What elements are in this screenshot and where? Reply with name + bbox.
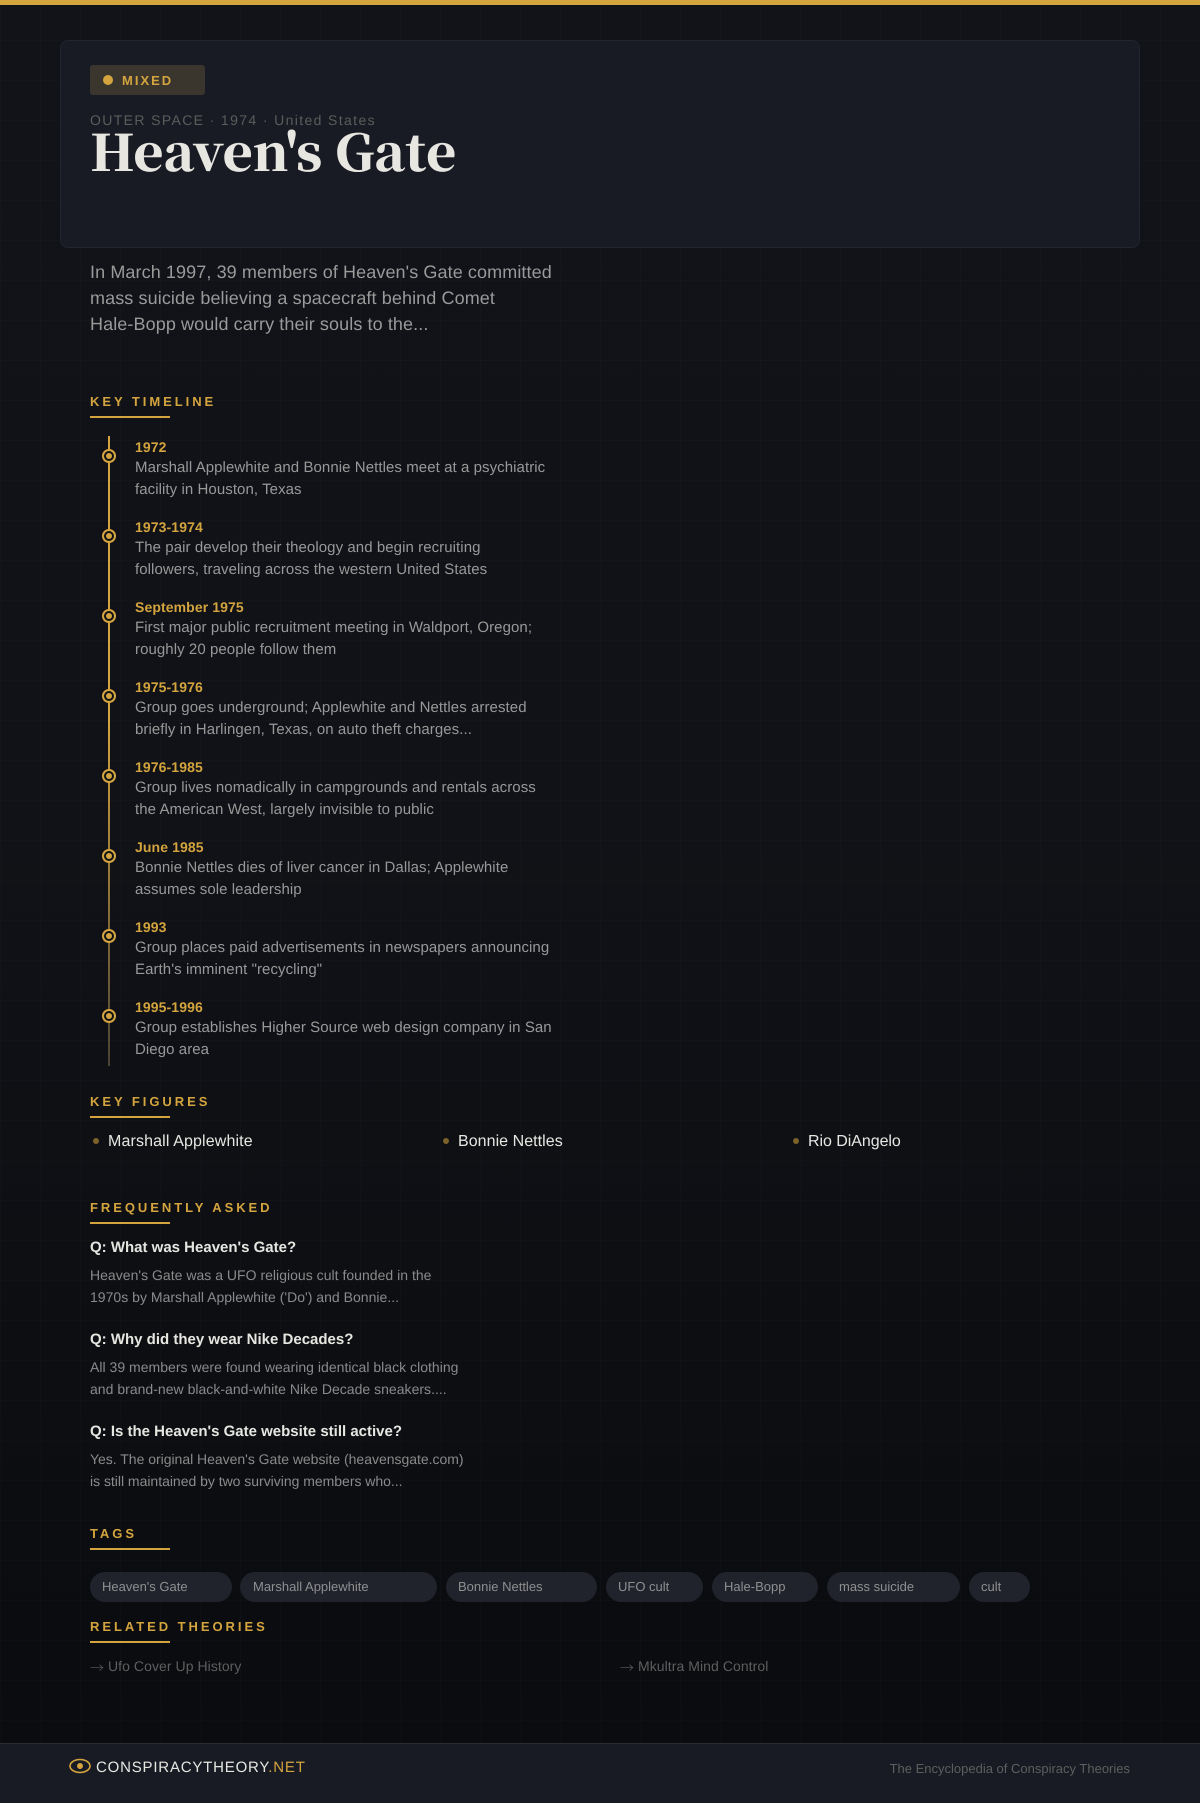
faq 1: Heaven's Gate was a UFO religious cult founded in the — [90, 1267, 431, 1283]
tag: cult: cult — [981, 1579, 1001, 1594]
event 1973-1974: 1973-1974 — [135, 519, 203, 535]
panel: header card — [60, 40, 1140, 248]
intro text — [90, 262, 552, 334]
event 1976-1985: the American West, largely invisible to public — [135, 801, 434, 818]
intro text: mass suicide believing a spacecraft behind Comet — [90, 288, 495, 308]
event June 1985: Bonnie Nettles dies of liver cancer in Dallas; Applewhite — [135, 859, 508, 876]
faq 1 — [90, 1239, 431, 1305]
tag: UFO cult — [606, 1572, 703, 1602]
event 1995-1996: 1995-1996 — [135, 999, 203, 1015]
timeline axis — [108, 436, 110, 1066]
event 1975-1976 — [102, 679, 527, 738]
event 1973-1974: The pair develop their theology and begin recruiting — [135, 539, 481, 556]
tag: UFO cult: UFO cult — [618, 1579, 669, 1594]
faq 3 — [90, 1423, 464, 1489]
event June 1985: assumes sole leadership — [135, 881, 302, 898]
top accent bar — [0, 0, 1200, 5]
event 1976-1985: 1976-1985 — [135, 759, 203, 775]
event 1993: 1993 — [135, 919, 167, 935]
footer — [0, 1743, 1200, 1803]
figure: Rio DiAngelo: Rio DiAngelo — [808, 1133, 901, 1150]
faq 3: Q: Is the Heaven's Gate website still active? — [90, 1423, 402, 1440]
event June 1985 — [102, 839, 508, 898]
faq 3: is still maintained by two surviving members who... — [90, 1473, 403, 1489]
heading: key figures: KEY FIGURES — [90, 1094, 210, 1109]
event 1995-1996: Diego area — [135, 1041, 209, 1058]
figure: Marshall Applewhite: Marshall Applewhite — [108, 1133, 253, 1150]
badge: mixed — [90, 65, 205, 95]
faq 1: 1970s by Marshall Applewhite ('Do') and Bonnie... — [90, 1289, 399, 1305]
event 1972: facility in Houston, Texas — [135, 481, 302, 498]
heading: key timeline: KEY TIMELINE — [90, 394, 216, 409]
meta line: OUTER SPACE · 1974 · United States — [90, 112, 376, 128]
tag: cult — [969, 1572, 1030, 1602]
title: Heaven's Gate — [90, 114, 456, 186]
related link: Ufo Cover Up History: → Ufo Cover Up History — [90, 1658, 241, 1678]
faq 2: All 39 members were found wearing identical black clothing — [90, 1359, 458, 1375]
event June 1985: June 1985 — [135, 839, 204, 855]
event 1993: Earth's imminent "recycling" — [135, 961, 322, 978]
tag: Marshall Applewhite: Marshall Applewhite — [253, 1579, 369, 1594]
tag: Bonnie Nettles: Bonnie Nettles — [458, 1579, 543, 1594]
tag: Hale-Bopp: Hale-Bopp — [724, 1579, 785, 1594]
icon: eye — [69, 1758, 91, 1774]
event 1975-1976: briefly in Harlingen, Texas, on auto theft charges... — [135, 721, 472, 738]
event September 1975 — [102, 599, 532, 658]
event 1972: 1972 — [135, 439, 167, 455]
event 1972 — [102, 439, 545, 498]
tag: Hale-Bopp — [712, 1572, 818, 1602]
event 1995-1996 — [102, 999, 552, 1058]
heading: related theories: RELATED THEORIES — [90, 1619, 268, 1634]
event 1976-1985 — [102, 759, 536, 818]
event 1995-1996: Group establishes Higher Source web design company in San — [135, 1019, 552, 1036]
heading: frequently asked: FREQUENTLY ASKED — [90, 1200, 273, 1215]
tagline: The Encyclopedia of Conspiracy Theories — [890, 1761, 1130, 1776]
badge: mixed: MIXED — [122, 73, 173, 88]
event 1975-1976: 1975-1976 — [135, 679, 203, 695]
tag: Bonnie Nettles — [446, 1572, 597, 1602]
tag: Marshall Applewhite — [240, 1572, 437, 1602]
heading: tags: TAGS — [90, 1526, 137, 1541]
event 1976-1985: Group lives nomadically in campgrounds and rentals across — [135, 779, 536, 796]
tag: Heaven's Gate — [90, 1572, 232, 1602]
tag: mass suicide: mass suicide — [839, 1579, 914, 1594]
faq 1: Q: What was Heaven's Gate? — [90, 1239, 296, 1256]
tag: Heaven's Gate: Heaven's Gate — [102, 1579, 188, 1594]
figure: Bonnie Nettles: Bonnie Nettles — [458, 1133, 563, 1150]
faq 3: Yes. The original Heaven's Gate website (heavensgate.com) — [90, 1451, 464, 1467]
event 1993: Group places paid advertisements in newspapers announcing — [135, 939, 549, 956]
faq 2: and brand-new black-and-white Nike Decade sneakers.... — [90, 1381, 447, 1397]
tag: mass suicide — [827, 1572, 960, 1602]
event 1972: Marshall Applewhite and Bonnie Nettles meet at a psychiatric — [135, 459, 545, 476]
event September 1975: roughly 20 people follow them — [135, 641, 336, 658]
related link: Mkultra Mind Control: → Mkultra Mind Control — [620, 1658, 768, 1678]
faq 2 — [90, 1331, 458, 1397]
event September 1975: September 1975 — [135, 599, 244, 615]
event September 1975: First major public recruitment meeting in Waldport, Oregon; — [135, 619, 532, 636]
intro text: In March 1997, 39 members of Heaven's Gate committed — [90, 262, 552, 282]
intro text: Hale-Bopp would carry their souls to the... — [90, 314, 428, 334]
event 1973-1974: followers, traveling across the western United States — [135, 561, 487, 578]
event 1973-1974 — [102, 519, 487, 578]
event 1993 — [102, 919, 549, 978]
logo wordmark: CONSPIRACYTHEORY.NET — [96, 1759, 306, 1776]
event 1975-1976: Group goes underground; Applewhite and Nettles arrested — [135, 699, 527, 716]
faq 2: Q: Why did they wear Nike Decades? — [90, 1331, 353, 1348]
